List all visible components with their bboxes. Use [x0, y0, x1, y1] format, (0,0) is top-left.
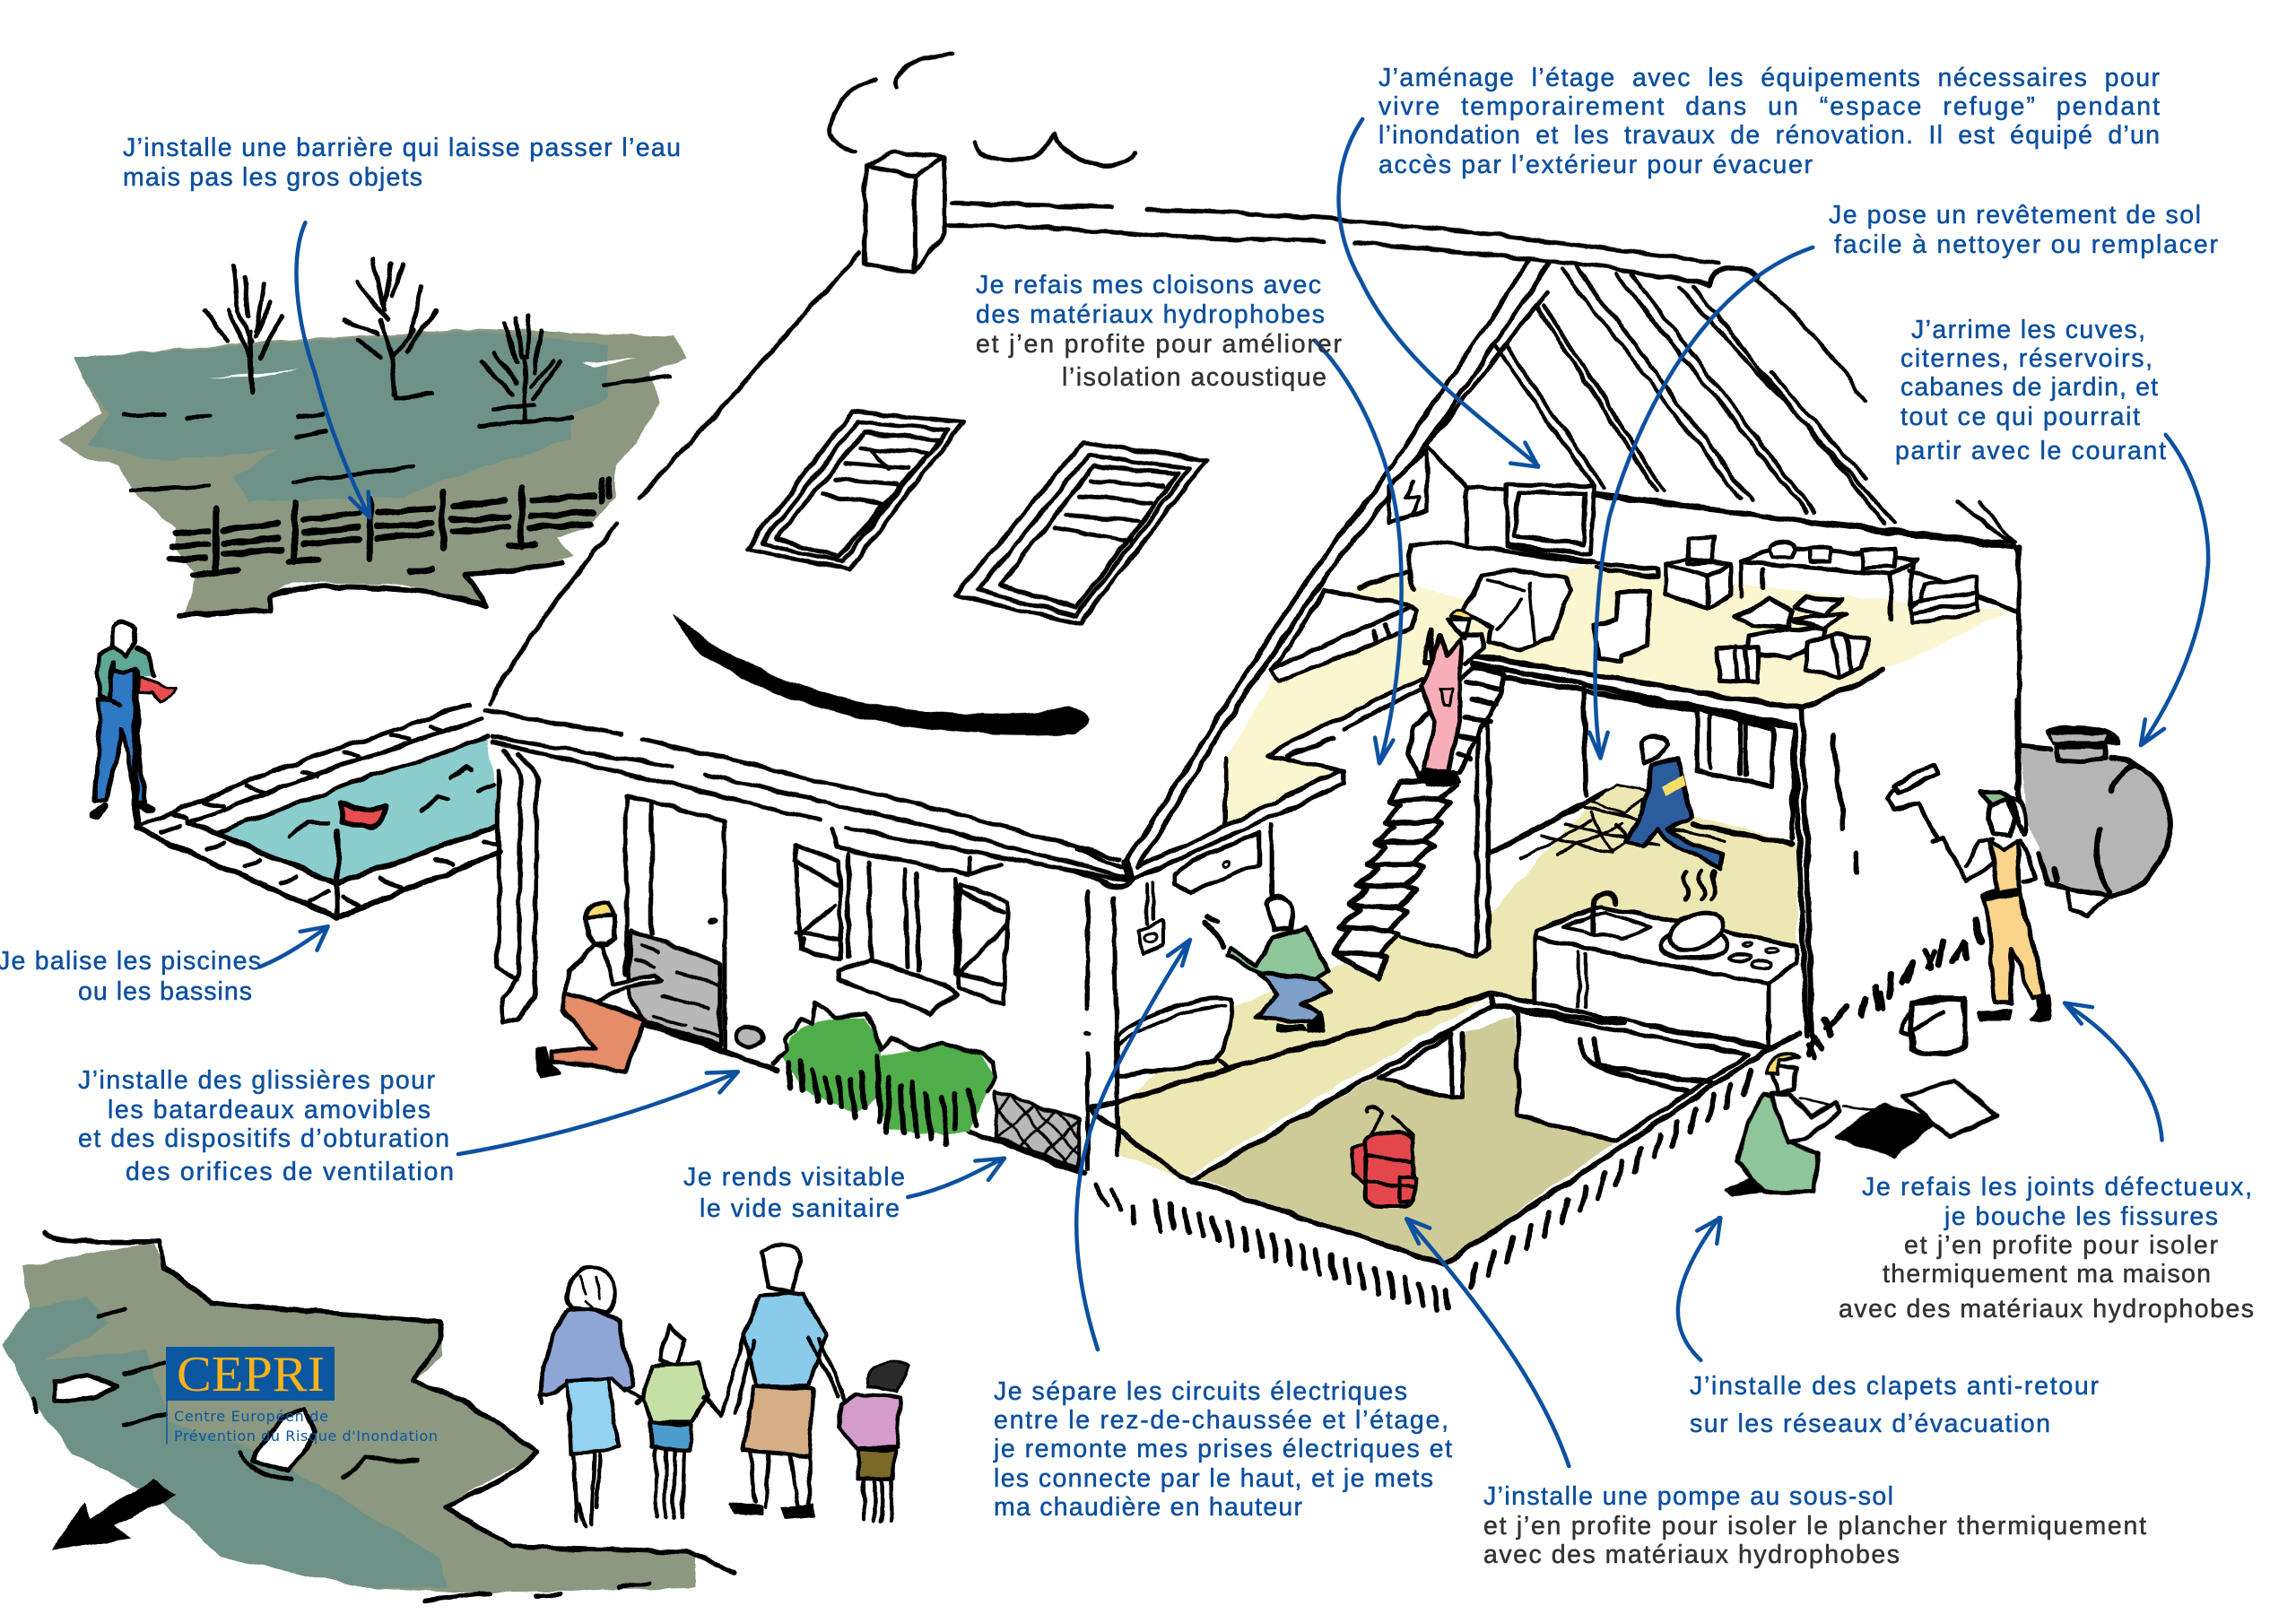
- text: joints: et j’en profite pour isoler: [1904, 1231, 2219, 1260]
- text: joints: Je refais les joints défectueux,: [1862, 1173, 2252, 1202]
- text: partitions: l’isolation acoustique: [1062, 363, 1326, 392]
- back window: [1697, 709, 1774, 787]
- worker in pink overalls on stairs: [1422, 636, 1462, 771]
- woman: [538, 1267, 644, 1526]
- linen pile: [1909, 577, 1979, 624]
- gable rake: [1127, 502, 1385, 868]
- illustration: painter with roller and bucket: [1809, 764, 2049, 1056]
- text: joints: avec des matériaux hydrophobes: [1839, 1295, 2254, 1324]
- kitchen: [1535, 907, 1797, 985]
- text: slides and vents: et des dispositifs d’obturation: [78, 1124, 449, 1153]
- text: tank anchoring: [1895, 316, 2166, 465]
- text: valves: J’installe des clapets anti-retour: [1690, 1372, 2099, 1401]
- text: electrical circuits: Je sépare les circuits électriques: [994, 1377, 1407, 1406]
- text: floor covering: facile à nettoyer ou remplacer: [1834, 230, 2219, 259]
- arrow: slides for flood barriers: [458, 1072, 738, 1154]
- logo: CEPRI: [166, 1347, 438, 1445]
- interior: stairs, workers, kitchen, appliances: [1076, 502, 1883, 1076]
- text: electrical circuits: entre le rez-de-chaussée et l’étage,: [994, 1406, 1448, 1435]
- stairs: [1334, 780, 1457, 979]
- logo: CEPRI: Centre Européen de: [174, 1408, 328, 1425]
- illustration: family seen from behind: [538, 1245, 908, 1526]
- text: pools: ou les bassins: [78, 977, 252, 1006]
- roof and smoke: [489, 55, 1757, 735]
- arrow: floor covering: [1589, 247, 1813, 759]
- text: partitions: [976, 271, 1342, 392]
- text: valves: sur les réseaux d’évacuation: [1690, 1410, 2050, 1438]
- arrow: fence barrier: [296, 222, 370, 517]
- text: refuge space: [1378, 64, 2160, 179]
- arrow: tank anchoring: [2141, 435, 2208, 745]
- illustration: crouching worker at manhole: [1726, 1054, 1997, 1194]
- illustration: worker with flag: [91, 622, 177, 828]
- text: pools: [0, 947, 261, 1006]
- man: [721, 1245, 846, 1518]
- arrow: partitions: [1315, 341, 1402, 763]
- washing machine: [1462, 569, 1570, 650]
- stacked boxes: [1665, 537, 1730, 608]
- girl: [637, 1326, 721, 1518]
- text: pools: Je balise les piscines: [0, 947, 261, 976]
- arrow: pool marking: [260, 926, 328, 967]
- ground hatching near corner: [1096, 1184, 1161, 1230]
- bed: [1269, 590, 1416, 681]
- illustration: house: [484, 55, 2019, 1311]
- worker laying floor tiles: [1522, 808, 1725, 859]
- arrow: refuge space: [1339, 119, 1538, 467]
- text: joints: je bouche les fissures: [1944, 1202, 2218, 1231]
- text: refuge space: l’inondation et les travaux de rénovation. Il est équipé d’un: [1378, 121, 2160, 150]
- text: tank anchoring: J’arrime les cuves,: [1911, 316, 2145, 344]
- text: pump: J’installe une pompe au sous-sol: [1483, 1482, 1893, 1511]
- arrow: basement pump: [1406, 1219, 1569, 1466]
- text: floor covering: Je pose un revêtement de sol: [1829, 201, 2201, 230]
- arrow: electrical circuits: [1076, 940, 1190, 1350]
- ground hatching: [1155, 920, 1979, 1311]
- text: electrical circuits: je remonte mes prises électriques et: [993, 1435, 1452, 1463]
- text: tank anchoring: cabanes de jardin, et: [1900, 373, 2158, 402]
- arrow: crawl space: [908, 1159, 1004, 1197]
- text: slides and vents: des orifices de ventilation: [126, 1158, 454, 1186]
- text: electrical circuits: [993, 1377, 1452, 1522]
- text: joints: thermiquement ma maison: [1883, 1260, 2211, 1289]
- text: slides and vents: J’installe des glissières pour: [78, 1066, 436, 1095]
- text: barrier: J’installe une barrière qui laisse passer l’eau: [123, 134, 681, 162]
- text: partitions: et j’en profite pour améliorer: [976, 330, 1342, 359]
- text: crawl space: Je rends visitable: [683, 1163, 905, 1192]
- logo: CEPRI: CEPRI: [177, 1347, 325, 1402]
- text: refuge space: accès par l’extérieur pour évacuer: [1378, 151, 1813, 179]
- arrow: non-return valves: [1678, 1218, 1720, 1360]
- text: crawl space: le vide sanitaire: [700, 1194, 900, 1223]
- text: tank anchoring: citernes, réservoirs,: [1900, 344, 2152, 373]
- illustration: fuel tank anchored to wall: [2018, 699, 2170, 916]
- plumber with wrench: [1228, 926, 1328, 977]
- text: tank anchoring: tout ce qui pourrait: [1900, 403, 2140, 431]
- text: barrier: [123, 134, 681, 192]
- text: pump: [1483, 1482, 2146, 1569]
- text: partitions: des matériaux hydrophobes: [976, 300, 1325, 329]
- toilet: [1594, 590, 1650, 661]
- text: floor covering: [1829, 201, 2219, 259]
- text: valves: [1690, 1372, 2099, 1438]
- illustration: swimming pool with rim and flag: [135, 706, 500, 917]
- text: electrical circuits: les connecte par le haut, et je mets: [994, 1464, 1433, 1493]
- floors: [1225, 564, 2012, 824]
- attic roof section: [1368, 261, 2019, 812]
- table with kettle and pan: [1741, 541, 1917, 621]
- text: partitions: Je refais mes cloisons avec: [976, 271, 1321, 299]
- text: refuge space: J’aménage l’étage avec les équipements nécessaires pour: [1378, 64, 2160, 92]
- illustration: flooded land with trees and fence: [58, 259, 686, 616]
- text: slides and vents: [78, 1066, 454, 1186]
- basement: [1090, 920, 1979, 1311]
- text: tank anchoring: partir avec le courant: [1895, 437, 2166, 465]
- logo: CEPRI: Prévention du Risque d'Inondation: [174, 1428, 438, 1445]
- front facade: eaves, door, barrier, window, bushes, vent: [484, 709, 1134, 1173]
- bathtub: [1118, 998, 1232, 1076]
- text: slides and vents: les batardeaux amovibles: [108, 1096, 430, 1124]
- arrow: wall joints: [2065, 1003, 2162, 1141]
- text: refuge space: vivre temporairement dans un “espace refuge” pendant: [1378, 92, 2160, 121]
- text: pump: avec des matériaux hydrophobes: [1483, 1541, 1900, 1569]
- illustration: flooded ground at bottom left: [4, 1233, 732, 1601]
- text: joints: [1839, 1173, 2254, 1324]
- text: electrical circuits: ma chaudière en hauteur: [994, 1493, 1302, 1522]
- text: pump: et j’en profite pour isoler le plancher thermiquement: [1483, 1512, 2146, 1541]
- child: [839, 1361, 908, 1521]
- text: crawl space: [683, 1163, 905, 1223]
- wall socket: [1139, 882, 1162, 954]
- text: barrier: mais pas les gros objets: [123, 163, 422, 192]
